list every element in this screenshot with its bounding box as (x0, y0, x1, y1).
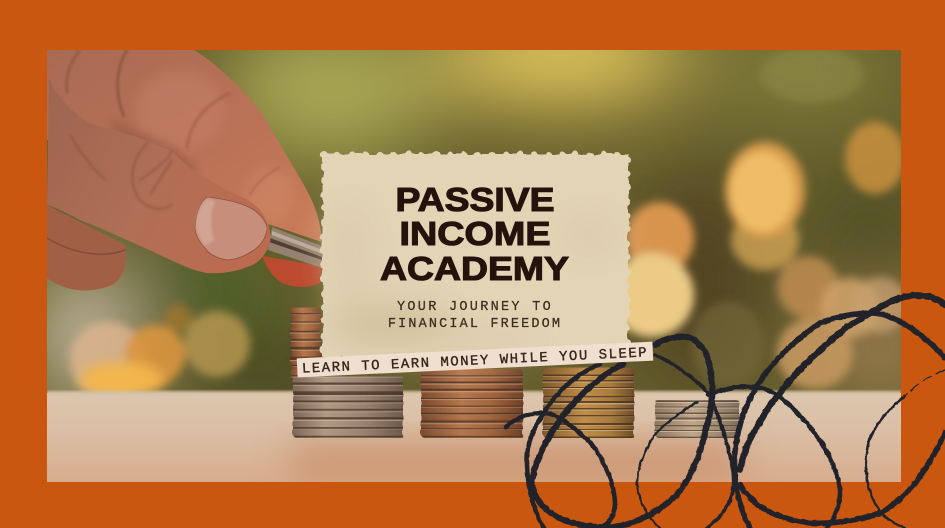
thumbnail (195, 197, 267, 260)
hand holding coins (47, 50, 322, 290)
coin stack small tall (291, 307, 321, 377)
fingers and palm mass (47, 50, 322, 242)
coin stack 4 (655, 400, 739, 438)
title: PASSIVE (396, 181, 554, 218)
knuckle creases (66, 50, 280, 209)
lower fingers (47, 205, 126, 290)
bokeh lights left (70, 304, 250, 398)
lower finger behind coins (262, 256, 322, 287)
title: ACADEMY (380, 250, 569, 287)
coins in fingers (268, 227, 322, 268)
subtitle (388, 300, 562, 332)
photo: hand placing coins on stacks (47, 50, 901, 482)
bokeh lights right (610, 47, 908, 389)
skin shading (110, 70, 294, 223)
thumb (47, 77, 271, 273)
low golden glow (80, 362, 164, 398)
left scribble loops (506, 337, 840, 528)
paper card with deckled edge (323, 154, 628, 356)
table surface (47, 391, 901, 482)
coin stack 1 (293, 375, 403, 438)
nail lunula (196, 199, 215, 246)
title: INCOME (400, 215, 550, 252)
right scribble loops (735, 295, 945, 528)
blurred background (47, 50, 901, 393)
coin stack 3 (543, 369, 634, 438)
title (380, 181, 569, 287)
subtitle: FINANCIAL FREEDOM (388, 317, 562, 332)
paper texture (325, 200, 620, 350)
tagline ribbon: LEARN TO EARN MONEY WHILE YOU SLEEP (302, 345, 649, 378)
black brush scribble (506, 295, 945, 528)
coin stack 2 (421, 370, 523, 438)
subtitle: YOUR JOURNEY TO (397, 300, 553, 315)
